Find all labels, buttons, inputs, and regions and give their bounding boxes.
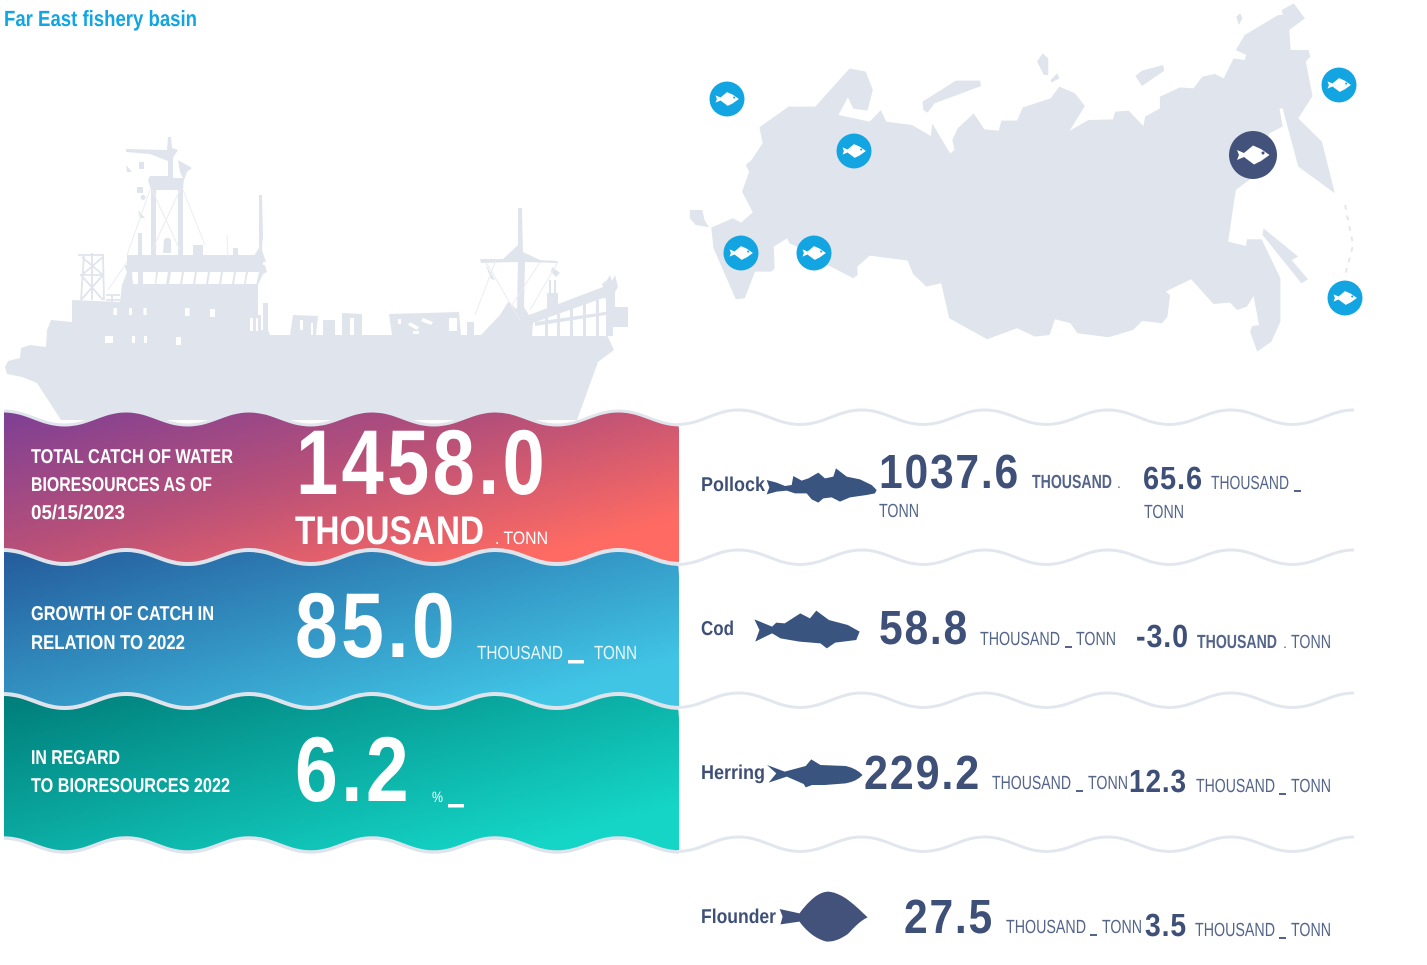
- ship windows and portholes: [105, 272, 612, 345]
- right column wave lines: [677, 410, 1354, 852]
- row: cod: [701, 602, 1331, 655]
- growth text: [31, 575, 637, 677]
- cod catch value: 58.8: [879, 602, 969, 655]
- pollock catch unit: THOUSAND: [1032, 472, 1112, 493]
- total catch label: [31, 446, 233, 524]
- flounder catch unit: THOUSAND: [1006, 917, 1086, 938]
- icon: pollock: [767, 468, 877, 503]
- total catch value: 1458.0: [296, 412, 548, 514]
- herring change value: 12.3: [1129, 763, 1187, 799]
- ship foremast: [126, 137, 192, 258]
- icon: flounder: [780, 892, 868, 942]
- map mainland: [711, 3, 1335, 352]
- pollock name: Pollock: [701, 474, 766, 496]
- cod change unit: .: [1283, 635, 1287, 651]
- bioresources label: [31, 747, 230, 797]
- map marker: [1322, 68, 1356, 102]
- map marker: [724, 236, 758, 270]
- flounder catch value: 27.5: [904, 891, 994, 944]
- pollock change unit: TONN: [1144, 502, 1184, 523]
- map marker: Far East highlighted: [1229, 131, 1277, 179]
- panel: total catch band: [4, 410, 679, 562]
- total catch label: BIORESOURCES AS OF: [31, 474, 212, 496]
- total catch unit tonn: . TONN: [495, 528, 548, 548]
- total catch label: 05/15/2023: [31, 502, 125, 524]
- growth label: GROWTH OF CATCH IN: [31, 603, 214, 625]
- map marker: [1328, 280, 1362, 316]
- herring change unit: TONN: [1291, 776, 1331, 797]
- herring name: Herring: [701, 762, 765, 784]
- title: Far East fishery basin: [4, 6, 197, 31]
- herring catch value: 229.2: [864, 747, 981, 800]
- cod catch unit: TONN: [1076, 629, 1116, 650]
- map marker: [796, 236, 832, 270]
- map marker: [836, 134, 872, 168]
- pollock change unit: [1144, 473, 1301, 523]
- total catch unit thousand: THOUSAND: [295, 509, 484, 553]
- growth unit: [477, 643, 637, 664]
- bioresources label: TO BIORESOURCES 2022: [31, 775, 230, 797]
- bioresources value: 6.2: [295, 719, 412, 821]
- flounder name: Flounder: [701, 906, 776, 928]
- pollock catch unit: TONN: [879, 501, 919, 522]
- map Kuril islands: [1344, 205, 1353, 278]
- flounder change unit: TONN: [1291, 920, 1331, 941]
- cod name: Cod: [701, 618, 734, 640]
- panel: bioresources band: [4, 692, 679, 850]
- panel: growth band: [4, 548, 679, 706]
- pollock change unit: THOUSAND: [1211, 473, 1289, 494]
- growth value: 85.0: [295, 575, 458, 677]
- growth label: RELATION TO 2022: [31, 632, 185, 654]
- colour wave bands: [4, 410, 679, 854]
- flounder change unit: THOUSAND: [1195, 920, 1275, 941]
- row: herring: [701, 747, 1331, 800]
- pollock catch unit: .: [1117, 475, 1121, 491]
- growth unit: THOUSAND: [477, 643, 563, 664]
- bioresources unit: %: [432, 789, 443, 806]
- icon: herring: [767, 759, 863, 787]
- ship silhouette: [5, 137, 628, 420]
- ship radar lattice: [78, 253, 120, 302]
- herring change unit: THOUSAND: [1196, 776, 1275, 797]
- row: pollock: [701, 446, 1301, 523]
- ship rigging: [108, 190, 558, 320]
- flounder catch unit: TONN: [1102, 917, 1142, 938]
- bioresources label: IN REGARD: [31, 747, 120, 769]
- map marker: [710, 82, 744, 116]
- cod change unit: TONN: [1291, 632, 1331, 653]
- growth unit: TONN: [594, 643, 637, 664]
- pollock catch unit: [879, 472, 1121, 522]
- total catch text: [31, 412, 548, 553]
- bottom wave edge: [4, 836, 679, 870]
- bioresources unit: [432, 789, 464, 808]
- pollock change value: 65.6: [1143, 460, 1203, 496]
- icon: cod: [754, 611, 860, 648]
- herring catch unit: THOUSAND: [992, 773, 1071, 794]
- herring catch unit: TONN: [1088, 773, 1128, 794]
- bioresources text: [31, 719, 464, 821]
- flounder change value: 3.5: [1145, 907, 1187, 943]
- ship main mast and crane: [480, 208, 628, 336]
- map of Russia: [690, 3, 1353, 352]
- cod catch unit: THOUSAND: [980, 629, 1060, 650]
- pollock catch value: 1037.6: [879, 446, 1020, 499]
- map islands: [690, 13, 1308, 283]
- row: flounder: [701, 891, 1331, 944]
- total catch label: TOTAL CATCH OF WATER: [31, 446, 233, 468]
- ship deck fittings: [127, 195, 266, 266]
- cod change unit: THOUSAND: [1197, 632, 1277, 653]
- cod change value: -3.0: [1136, 618, 1189, 654]
- growth label: [31, 603, 214, 654]
